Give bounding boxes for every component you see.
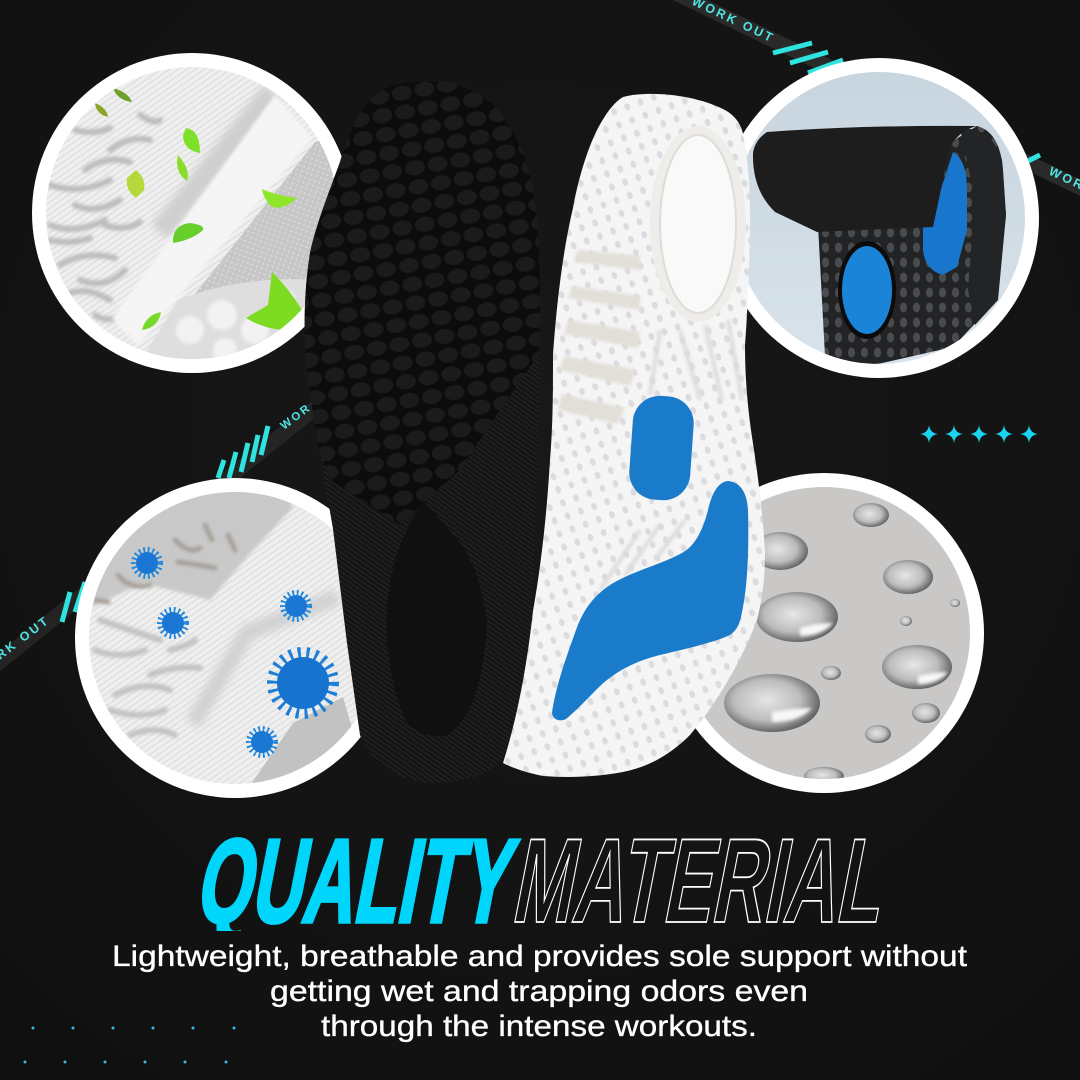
icon: virus particles — [134, 550, 333, 755]
black fabric fold — [753, 126, 977, 232]
diagonal band: bottom left: WOR — [279, 402, 314, 432]
description text: Lightweight, breathable and provides sole support without — [112, 940, 968, 973]
circle: breathable fabric with leaves — [32, 53, 360, 373]
insole: black top side — [300, 70, 545, 790]
icon: green leaves — [95, 88, 302, 330]
diagonal band: bottom left — [0, 396, 330, 668]
circle: water droplets — [664, 473, 984, 793]
ridges between heel and pad — [600, 320, 742, 590]
heel cup — [650, 126, 746, 322]
icon: droplets — [724, 503, 960, 785]
blue pad inner — [923, 152, 967, 275]
blue pad: arch — [552, 481, 748, 720]
dark insole underside — [818, 126, 1006, 368]
side ribs — [558, 250, 640, 424]
circle: foam cross-section — [719, 58, 1039, 378]
title: quality material — [202, 837, 880, 931]
decorative stars — [920, 425, 1038, 443]
description text: through the intense workouts. — [321, 1010, 757, 1043]
grey wedge — [252, 697, 352, 783]
decorative dots — [24, 1026, 236, 1064]
blue pad: metatarsal — [627, 394, 696, 502]
grey mesh top — [92, 492, 294, 608]
circle: antibacterial fabric with viruses — [75, 478, 361, 798]
grey stripe — [193, 597, 337, 723]
title: quality material: QUALITY — [189, 815, 526, 948]
blue pad oval — [838, 241, 896, 339]
description text — [112, 940, 968, 1043]
diagonal band: top right — [665, 0, 1080, 198]
bumpy knit at bottom — [146, 279, 306, 359]
insole: white underside with blue pads — [503, 94, 765, 777]
description text: getting wet and trapping odors even — [270, 975, 808, 1008]
white strap — [112, 95, 312, 345]
